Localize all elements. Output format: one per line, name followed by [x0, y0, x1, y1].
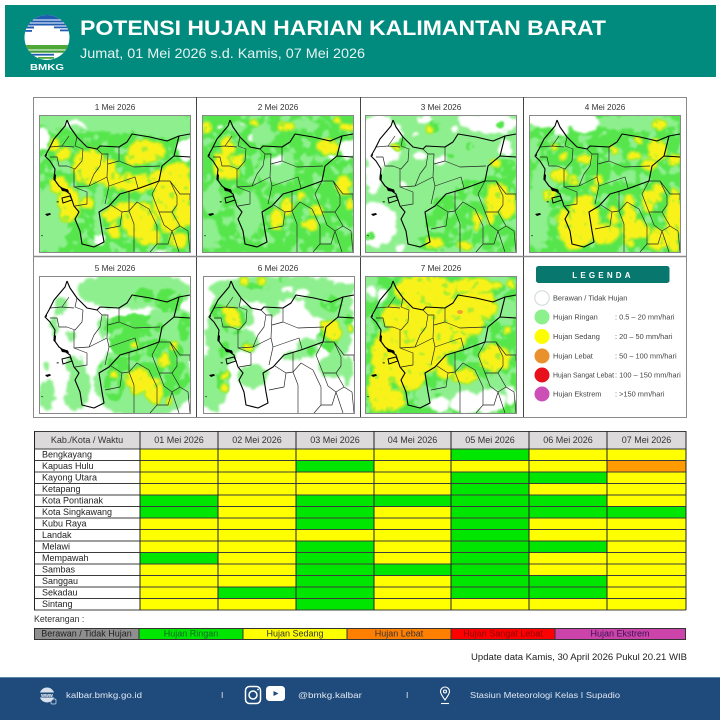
icon: website globe: www [40, 693, 53, 699]
table body: coloured cells: Kayong Utara [42, 472, 97, 482]
map: 4 Mei 2026 [515, 101, 695, 267]
category key bar [34, 628, 686, 640]
legend item: Hujan Ekstrem [534, 386, 665, 402]
panel: rainfall maps grid [25, 97, 695, 428]
map: 4 Mei 2026: 4 Mei 2026 [585, 103, 626, 112]
table header: 06 Mei 2026 [543, 435, 593, 445]
map: 2 Mei 2026 [188, 101, 368, 267]
table body: coloured cells: Sintang [42, 599, 73, 609]
subtitle: date range: Jumat, 01 Mei 2026 s.d. Kamis, 07 Mei 2026 [80, 45, 365, 61]
panel: map legend [534, 266, 681, 402]
separator: I [406, 690, 408, 700]
table body: coloured cells: Kota Singkawang [42, 507, 112, 517]
table body: coloured cells: Sambas [42, 564, 76, 574]
category key bar: Hujan Ekstrem [590, 629, 650, 639]
map: 5 Mei 2026: 5 Mei 2026 [95, 264, 136, 273]
table: rain forecast per regency [34, 431, 686, 610]
legend item: Hujan Lebat [534, 348, 677, 364]
legend item: Hujan Sangat Lebat [534, 368, 681, 382]
table body: coloured cells: Mempawah [42, 553, 89, 563]
table header: 05 Mei 2026 [465, 435, 515, 445]
legend heading [536, 266, 670, 283]
table header: 01 Mei 2026 [154, 435, 204, 445]
table body: coloured cells: Kapuas Hulu [42, 461, 94, 471]
legend item: Hujan Ekstrem: : >150 mm/hari [615, 390, 665, 398]
map: 6 Mei 2026 [197, 264, 358, 414]
separator: I [221, 690, 223, 700]
legend item: Hujan Sedang [534, 329, 673, 344]
legend item: Berawan: Berawan / Tidak Hujan [553, 294, 627, 302]
map: 3 Mei 2026: 3 Mei 2026 [421, 103, 462, 112]
legend item: Hujan Ringan [534, 310, 675, 324]
table body: coloured cells: Kubu Raya [42, 518, 87, 528]
table body: coloured cells: Landak [42, 530, 72, 540]
category key bar: Berawan / Tidak Hujan [41, 629, 132, 639]
table header: Kab./Kota / Waktu [51, 435, 123, 445]
legend item: Hujan Lebat: Hujan Lebat [553, 352, 593, 360]
icon: youtube [266, 686, 285, 701]
table header [34, 431, 686, 449]
label: Keterangan: Keterangan : [34, 614, 84, 624]
map: 5 Mei 2026 [39, 264, 197, 419]
table body: coloured cells: Melawi [42, 542, 70, 552]
category key bar: Hujan Ringan [164, 629, 218, 639]
map: 1 Mei 2026: 1 Mei 2026 [95, 103, 136, 112]
category key bar: Hujan Sangat Lebat [463, 629, 543, 639]
social handle: @bmkg.kalbar [298, 690, 362, 700]
website url: kalbar.bmkg.go.id [66, 690, 142, 700]
map: 7 Mei 2026: 7 Mei 2026 [421, 264, 462, 273]
legend heading: LEGENDA [572, 271, 634, 280]
icon: location pin [440, 687, 450, 704]
table header: 02 Mei 2026 [232, 435, 282, 445]
map: 3 Mei 2026 [357, 103, 520, 255]
table header: 04 Mei 2026 [388, 435, 437, 445]
category key bar: Hujan Lebat [375, 629, 424, 639]
legend item: Hujan Ekstrem: Hujan Ekstrem [553, 390, 601, 398]
icon: instagram [246, 686, 260, 704]
map: 2 Mei 2026: 2 Mei 2026 [258, 103, 299, 112]
title: POTENSI HUJAN HARIAN KALIMANTAN BARAT [80, 16, 606, 40]
header banner [5, 5, 716, 77]
category key bar: Hujan Sedang [266, 629, 324, 639]
legend item: Hujan Ringan: : 0.5 – 20 mm/hari [615, 312, 675, 322]
icon: website globe [38, 688, 56, 704]
legend item: Hujan Sangat Lebat: : 100 – 150 mm/hari [615, 370, 681, 380]
table body: coloured cells: Kota Pontianak [42, 496, 104, 506]
table header: 07 Mei 2026 [622, 435, 671, 445]
legend item: Hujan Sangat Lebat: Hujan Sangat Lebat [553, 370, 614, 380]
table body: coloured cells: Bengkayang [42, 450, 92, 460]
legend item: Berawan [535, 291, 627, 305]
legend item: Hujan Sedang: : 20 – 50 mm/hari [615, 332, 673, 341]
table body: coloured cells: Sekadau [42, 588, 78, 598]
map: 1 Mei 2026 [25, 101, 205, 267]
legend item: Hujan Ringan: Hujan Ringan [553, 312, 598, 322]
icon: BMKG logo: BMKG [30, 62, 64, 72]
legend item: Hujan Lebat: : 50 – 100 mm/hari [615, 352, 677, 360]
icon: BMKG logo [24, 15, 70, 72]
table body: coloured cells [42, 449, 686, 610]
footer bar [0, 677, 720, 720]
legend item: Hujan Sedang: Hujan Sedang [553, 332, 600, 341]
map: 6 Mei 2026: 6 Mei 2026 [258, 264, 299, 273]
map: 7 Mei 2026 [351, 262, 531, 428]
table header: 03 Mei 2026 [310, 435, 360, 445]
station name: Stasiun Meteorologi Kelas I Supadio [470, 690, 620, 700]
update timestamp: Update data Kamis, 30 April 2026 Pukul 20.21 WIB [471, 652, 687, 663]
table body: coloured cells: Sanggau [42, 576, 78, 586]
table body: coloured cells: Ketapang [42, 484, 81, 494]
